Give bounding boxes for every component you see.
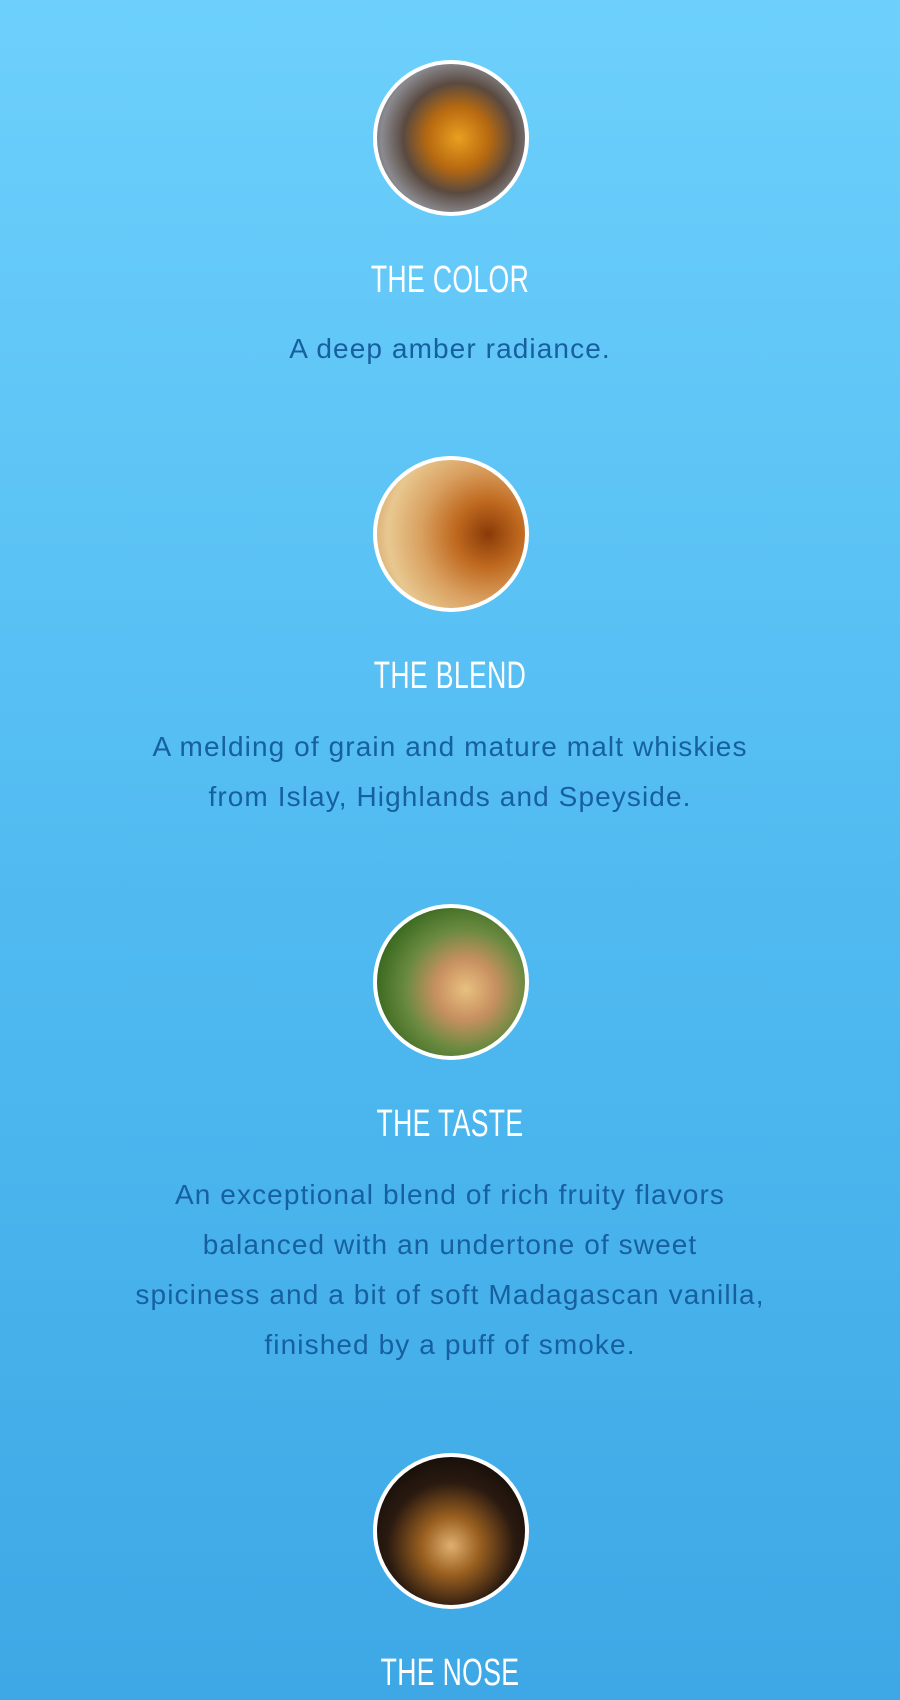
icon: blend <box>373 456 529 612</box>
text: taste: finished by a puff of smoke. <box>264 1329 636 1360</box>
text: blend <box>152 731 748 812</box>
text: color: A deep amber radiance. <box>289 333 611 364</box>
text: blend: A melding of grain and mature malt whiskies <box>152 731 748 762</box>
title: the nose: THE NOSE <box>381 1652 519 1694</box>
text: taste: spiciness and a bit of soft Madagascan vanilla, <box>135 1279 765 1310</box>
icon: whisky glass color <box>373 60 529 216</box>
text: taste <box>135 1179 765 1360</box>
icon: nose <box>373 1453 529 1609</box>
icon: taste <box>373 904 529 1060</box>
title: the color: THE COLOR <box>371 259 529 301</box>
title: the taste: THE TASTE <box>376 1103 524 1145</box>
title: the blend: THE BLEND <box>374 655 526 697</box>
text: taste: balanced with an undertone of sweet <box>203 1229 697 1260</box>
text: blend: from Islay, Highlands and Speyside. <box>208 781 692 812</box>
text: taste: An exceptional blend of rich fruity flavors <box>175 1179 725 1210</box>
